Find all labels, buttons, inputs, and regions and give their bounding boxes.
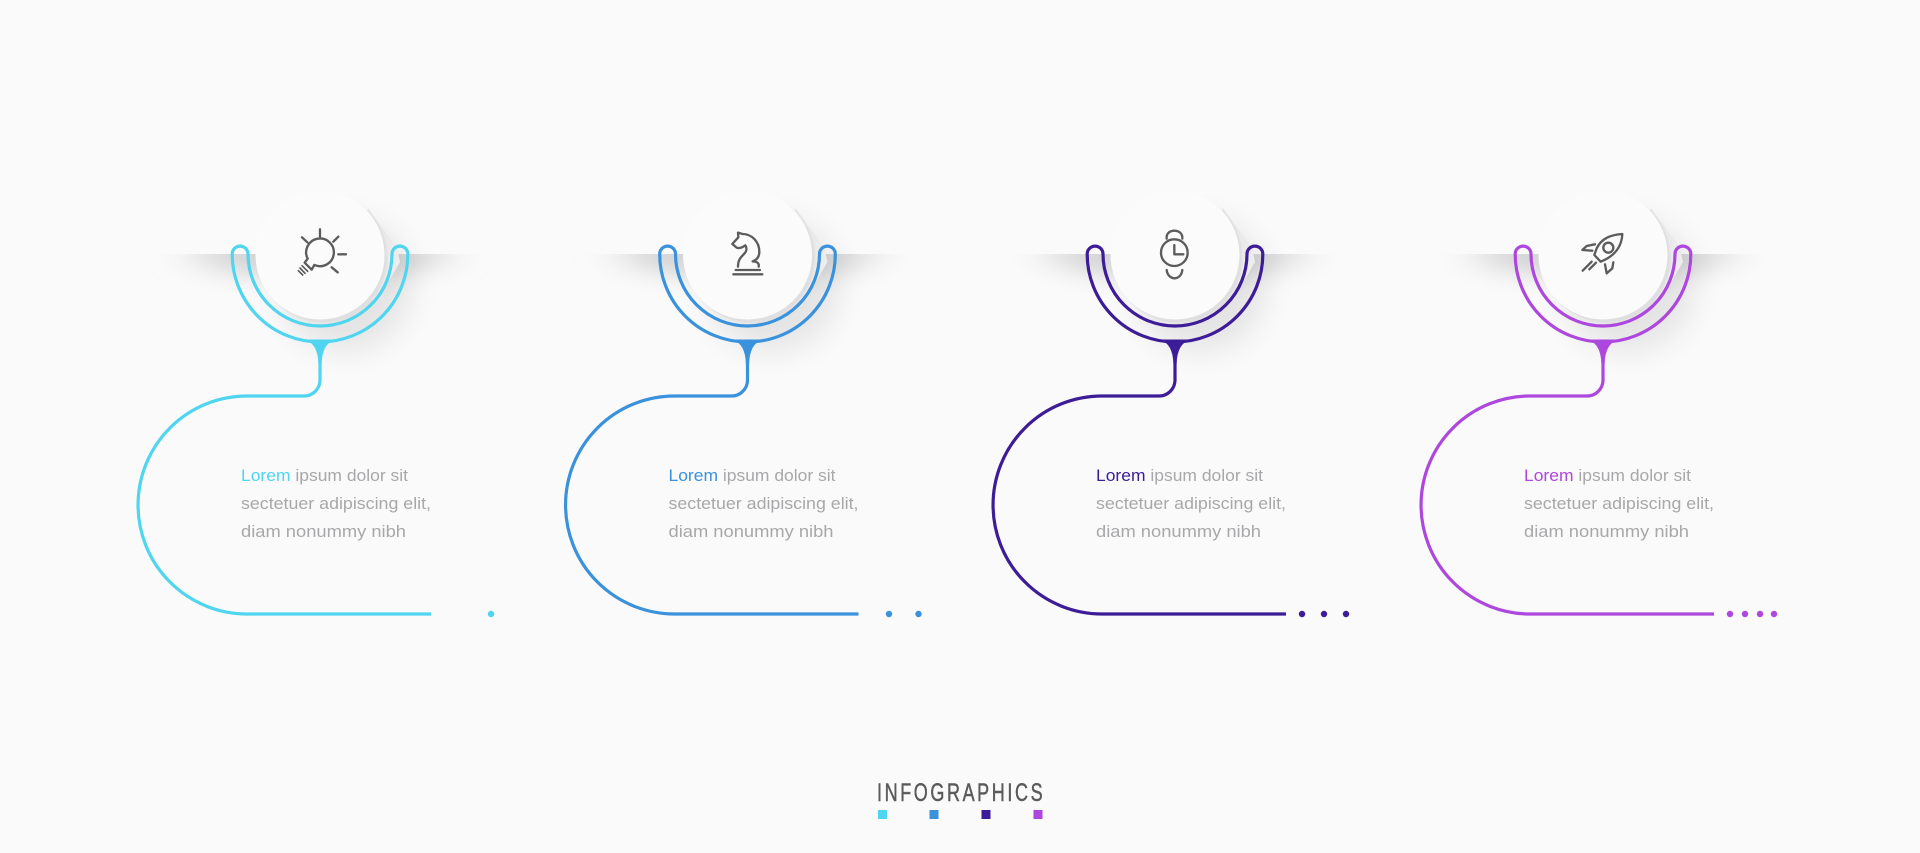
circle button — [683, 190, 812, 320]
text block — [1524, 466, 1714, 541]
U connector and path — [993, 246, 1286, 614]
icon: light bulb — [298, 229, 346, 275]
text block: diam nonummy nibh — [241, 522, 406, 541]
panel: step 3 — [993, 190, 1349, 617]
text block: diam nonummy nibh — [1524, 522, 1689, 541]
U connector and path — [1421, 246, 1714, 614]
text block: diam nonummy nibh — [1096, 522, 1261, 541]
step marker dots — [488, 611, 494, 617]
text block: Lorem ipsum dolor sit — [1524, 466, 1691, 485]
panel: step 4 — [1421, 190, 1777, 617]
circle button — [256, 190, 384, 320]
connector flare — [1588, 340, 1618, 364]
title: INFOGRAPHICS — [877, 778, 1043, 807]
text block: Lorem ipsum dolor sit — [668, 466, 836, 485]
connector flare — [1160, 340, 1190, 364]
text block: Lorem ipsum dolor sit — [1096, 466, 1263, 485]
text block: sectetuer adipiscing elit, — [1096, 494, 1286, 513]
circle shadows — [1050, 194, 1300, 351]
icon: wristwatch — [1161, 231, 1188, 278]
step marker dots — [886, 611, 922, 617]
text block: diam nonummy nibh — [668, 522, 834, 541]
text block — [668, 466, 858, 541]
text block: sectetuer adipiscing elit, — [241, 494, 431, 513]
text block — [241, 466, 431, 541]
panel: step 1 — [138, 190, 494, 617]
circle shadows — [195, 194, 445, 351]
circle button — [1538, 190, 1668, 320]
text block: Lorem ipsum dolor sit — [241, 466, 408, 485]
text block — [1096, 466, 1286, 541]
icon: rocket — [1582, 234, 1622, 273]
circle shadows — [1478, 194, 1728, 351]
step marker dots — [1727, 611, 1777, 617]
icon: chess knight — [732, 233, 762, 274]
U connector and path — [566, 246, 858, 614]
circle shadows — [622, 194, 872, 351]
text block: sectetuer adipiscing elit, — [1524, 494, 1714, 513]
U connector and path — [138, 246, 431, 614]
panel: step 2 — [566, 190, 922, 617]
legend squares — [878, 810, 1042, 819]
step marker dots — [1299, 611, 1349, 617]
text block: sectetuer adipiscing elit, — [668, 494, 858, 513]
connector flare — [732, 340, 762, 364]
connector flare — [305, 340, 335, 364]
circle button — [1110, 190, 1240, 320]
